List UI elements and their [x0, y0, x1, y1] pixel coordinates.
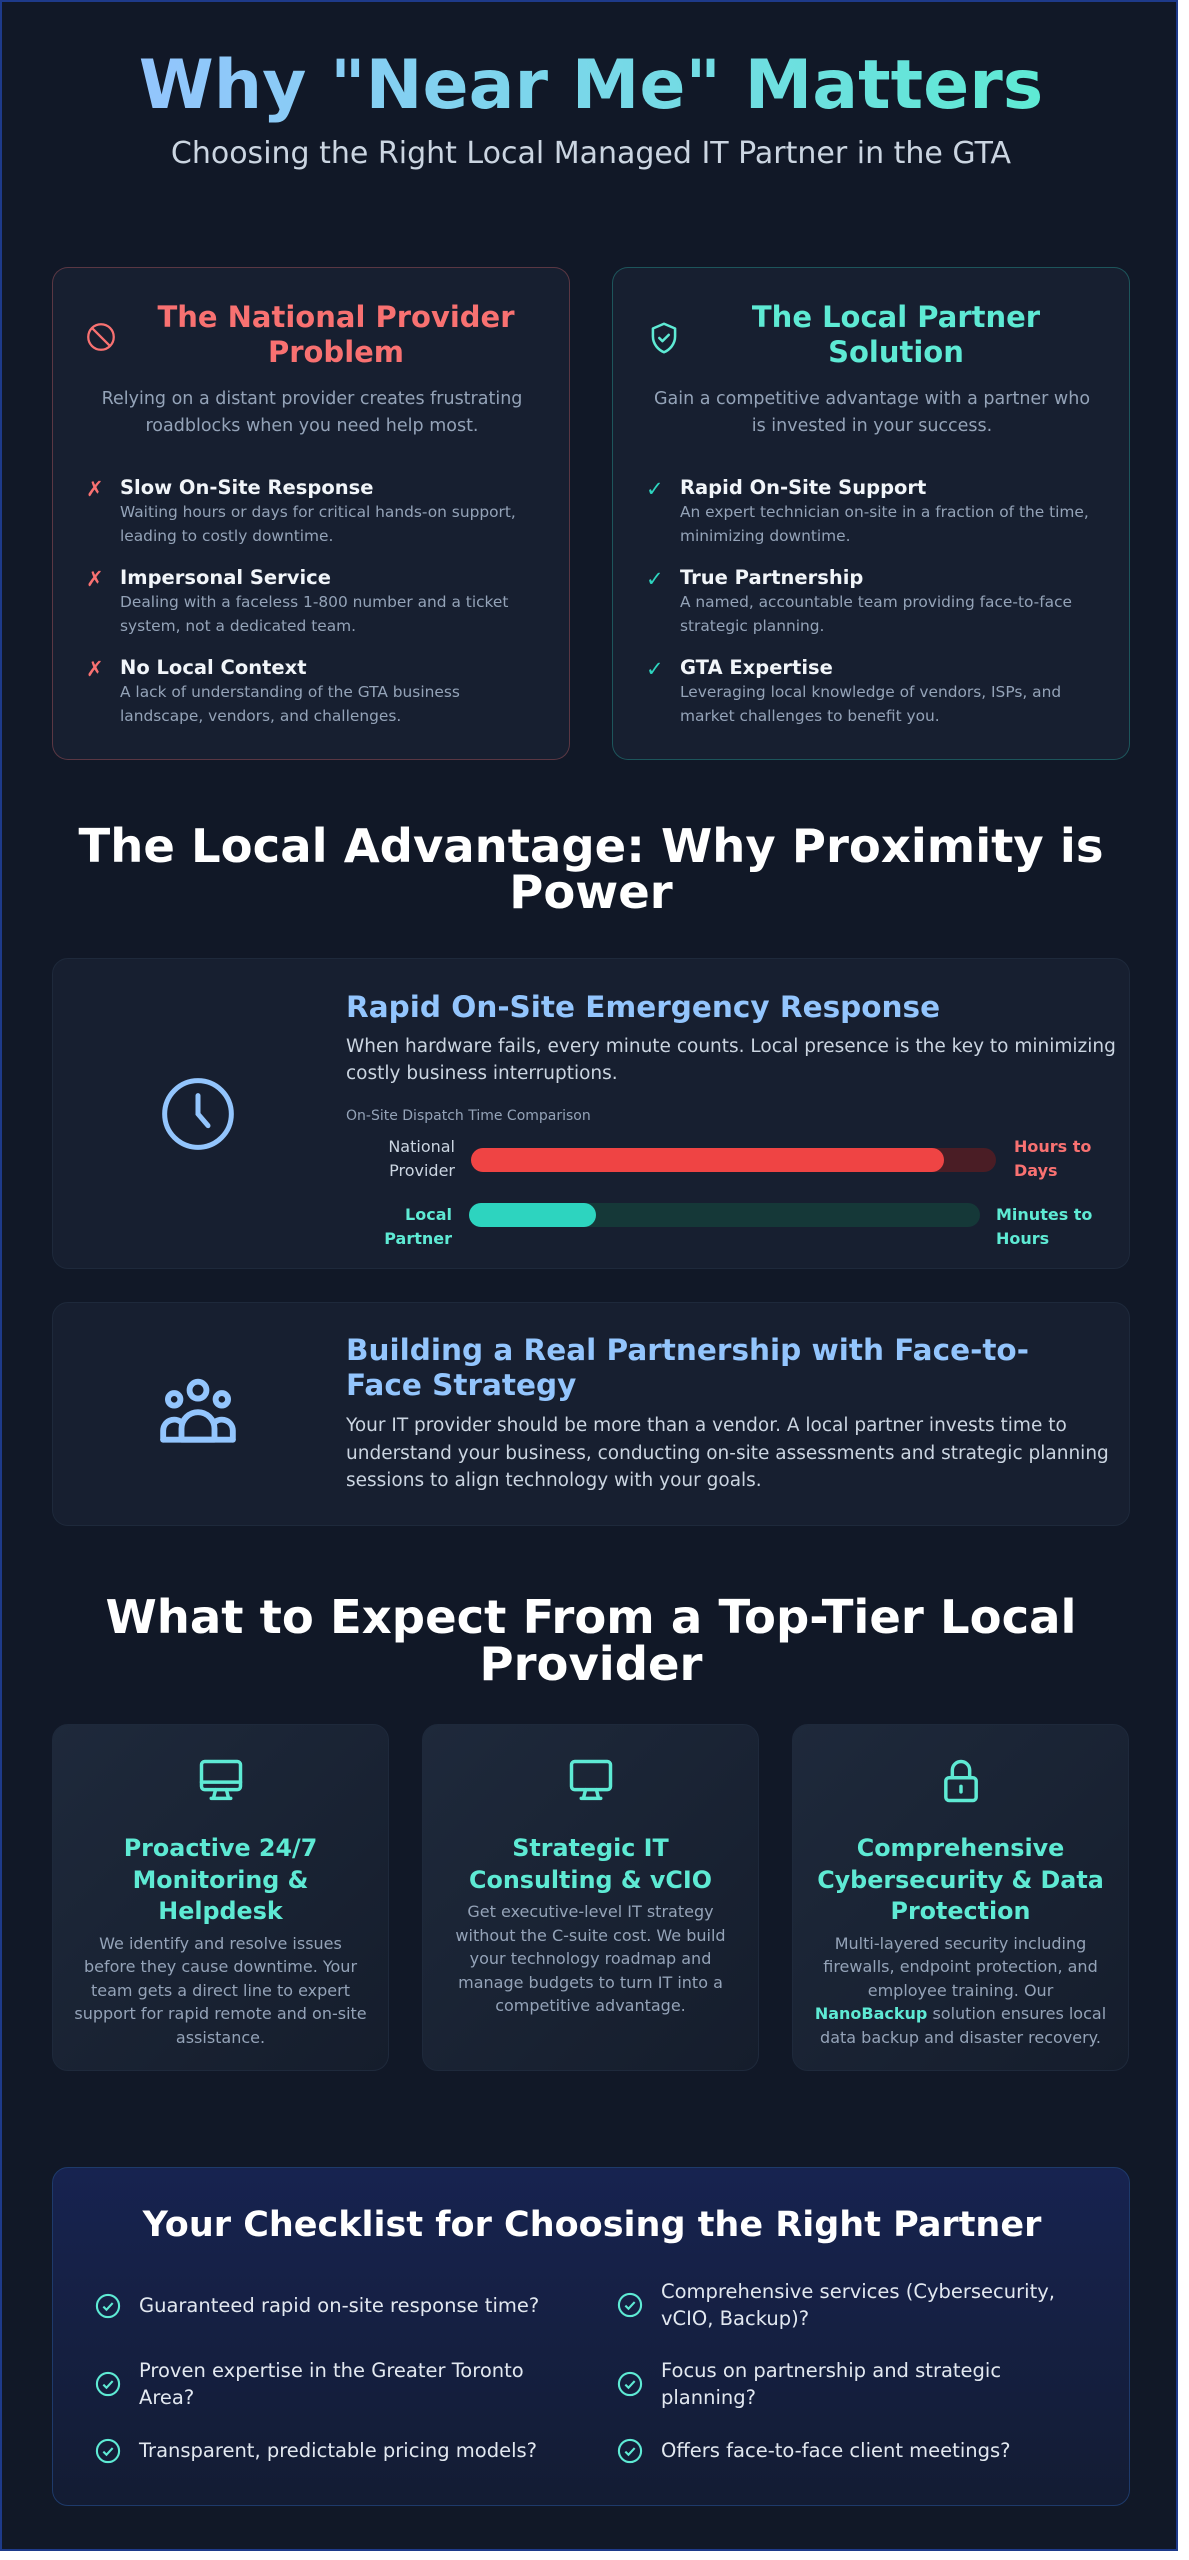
- panel: emergency response: Partner: [384, 1229, 452, 1248]
- title: Why "Near Me" Matters: [139, 46, 1043, 125]
- chart label: On-Site Dispatch Time Comparison: [346, 1108, 591, 1124]
- card: monitoring: [52, 1724, 389, 2071]
- bar chart: [384, 1137, 1092, 1248]
- heading: Rapid On-Site Emergency Response: [346, 990, 940, 1024]
- heading: local: [752, 300, 1040, 369]
- heading: Face Strategy: [346, 1368, 576, 1402]
- item: no local context: No Local Context: [120, 656, 307, 679]
- icon: screen: [570, 1760, 612, 1800]
- bar chart: Days: [1014, 1161, 1058, 1180]
- card: cybersecurity: [792, 1724, 1129, 2071]
- description: [346, 1036, 1116, 1084]
- icon: ban: [87, 323, 115, 351]
- heading: [346, 1333, 1029, 1402]
- icon: monitor: [200, 1760, 242, 1800]
- check item 6: Offers face-to-face client meetings?: [661, 2439, 1010, 2462]
- item: slow response: ✗: [86, 477, 104, 501]
- panel: partnership: [52, 1302, 1130, 1526]
- card: consulting: Strategic IT Consulting & vCIO: [469, 1834, 712, 1894]
- description: costly business interruptions.: [346, 1063, 618, 1084]
- icon: lock: [944, 1760, 978, 1802]
- heading: local advantage: [78, 819, 1104, 919]
- item: impersonal: [86, 566, 508, 635]
- description: sessions to align technology with your goals.: [346, 1470, 762, 1491]
- bar chart: Local: [405, 1205, 452, 1224]
- item: partnership: ✓: [646, 567, 664, 591]
- heading: local advantage: The Local Advantage: Why Proximity is: [78, 819, 1104, 873]
- intro text: Relying on a distant provider creates frustrating roadblocks when you need help most.: [102, 389, 522, 436]
- check item 1: Guaranteed rapid on-site response time?: [139, 2294, 539, 2317]
- item: no local context: ✗: [86, 657, 104, 681]
- check item 4: Focus on partnership and strategic planning?: [661, 2359, 1001, 2409]
- item: impersonal: ✗: [86, 567, 104, 591]
- icon: users: [160, 1378, 236, 1443]
- intro text: [654, 389, 1090, 436]
- item: impersonal: Dealing with a faceless 1-800 number and a ticket system, not a dedicated team.: [120, 593, 508, 635]
- heading: local: The Local Partner: [752, 300, 1040, 334]
- item: GTA expertise: [646, 656, 1061, 725]
- panel: checklist: [52, 2167, 1130, 2506]
- heading: what to expect: Provider: [480, 1637, 702, 1691]
- heading: Building a Real Partnership with Face-to-: [346, 1333, 1029, 1367]
- panel: emergency response: Hours: [996, 1229, 1049, 1248]
- panel: emergency response: [52, 958, 1130, 1269]
- item: GTA expertise: ✓: [646, 657, 664, 681]
- heading: what to expect: [105, 1590, 1076, 1691]
- heading: local advantage: Power: [509, 865, 673, 919]
- check item 2: Comprehensive services (Cybersecurity, vCIO, Backup)?: [661, 2280, 1055, 2330]
- heading: national: The National Provider Problem: [157, 300, 515, 369]
- item: impersonal: Impersonal Service: [120, 566, 331, 589]
- intro text: is invested in your success.: [752, 416, 992, 436]
- item: partnership: [646, 566, 1072, 635]
- heading: local: Solution: [828, 335, 964, 369]
- panel: local partner solution: [612, 267, 1130, 760]
- check item 5: Transparent, predictable pricing models?: [139, 2439, 537, 2462]
- heading: what to expect: What to Expect From a Top-Tier Local: [105, 1590, 1076, 1644]
- item: partnership: A named, accountable team providing face-to-face strategic planning.: [680, 593, 1072, 635]
- card: monitoring: We identify and resolve issues before they cause downtime. Your team gets a direct line to expert support for rapid remote and on-site assistance.: [74, 1934, 367, 2047]
- card: monitoring: Proactive 24/7 Monitoring & Helpdesk: [124, 1834, 317, 1925]
- intro text: Gain a competitive advantage with a partner who: [654, 389, 1090, 409]
- item: partnership: True Partnership: [680, 566, 863, 589]
- item: no local context: A lack of understanding of the GTA business landscape, vendors, and challenges.: [120, 683, 460, 725]
- icon: clock: [162, 1078, 234, 1150]
- item: GTA expertise: GTA Expertise: [680, 656, 833, 679]
- item: slow response: Waiting hours or days for critical hands-on support, leading to costly downtime.: [120, 503, 516, 545]
- item: no local context: [86, 656, 460, 725]
- card: consulting: [422, 1724, 759, 2071]
- card: cybersecurity: Comprehensive Cybersecurity & Data Protection: [817, 1834, 1104, 1925]
- description: understand your business, conducting on-site assessments and strategic planning: [346, 1442, 1109, 1464]
- description: [346, 1415, 1109, 1491]
- item: rapid support: Rapid On-Site Support: [680, 476, 926, 499]
- item: rapid support: An expert technician on-site in a fraction of the time, minimizing downtime.: [680, 503, 1089, 545]
- card: consulting: Get executive-level IT strategy without the C-suite cost. We build your technology roadmap and manage budgets to turn IT into a competitive advantage.: [455, 1902, 726, 2015]
- subtitle: Choosing the Right Local Managed IT Partner in the GTA: [171, 136, 1011, 171]
- item: rapid support: [646, 476, 1089, 545]
- bar chart: National Provider: [388, 1137, 455, 1180]
- item: GTA expertise: Leveraging local knowledge of vendors, ISPs, and market challenges to benefit you.: [680, 683, 1061, 725]
- check item 3: Proven expertise in the Greater Toronto Area?: [139, 2359, 524, 2409]
- checklist heading: Your Checklist for Choosing the Right Partner: [143, 2205, 1041, 2245]
- description: When hardware fails, every minute counts. Local presence is the key to minimizing: [346, 1036, 1116, 1057]
- item: slow response: [86, 476, 516, 545]
- item: slow response: Slow On-Site Response: [120, 476, 373, 499]
- bar chart: Hours to: [1014, 1137, 1091, 1156]
- bar chart: Minutes to: [996, 1205, 1092, 1224]
- icon: shield: [652, 322, 676, 354]
- item: rapid support: ✓: [646, 477, 664, 501]
- card: cybersecurity: Multi-layered security including firewalls, endpoint protection, and employee training. Our NanoBackup solution ensures local data backup and disaster recovery.: [815, 1934, 1106, 2047]
- panel: national provider problem: [52, 267, 570, 760]
- description: Your IT provider should be more than a vendor. A local partner invests time to: [346, 1415, 1067, 1436]
